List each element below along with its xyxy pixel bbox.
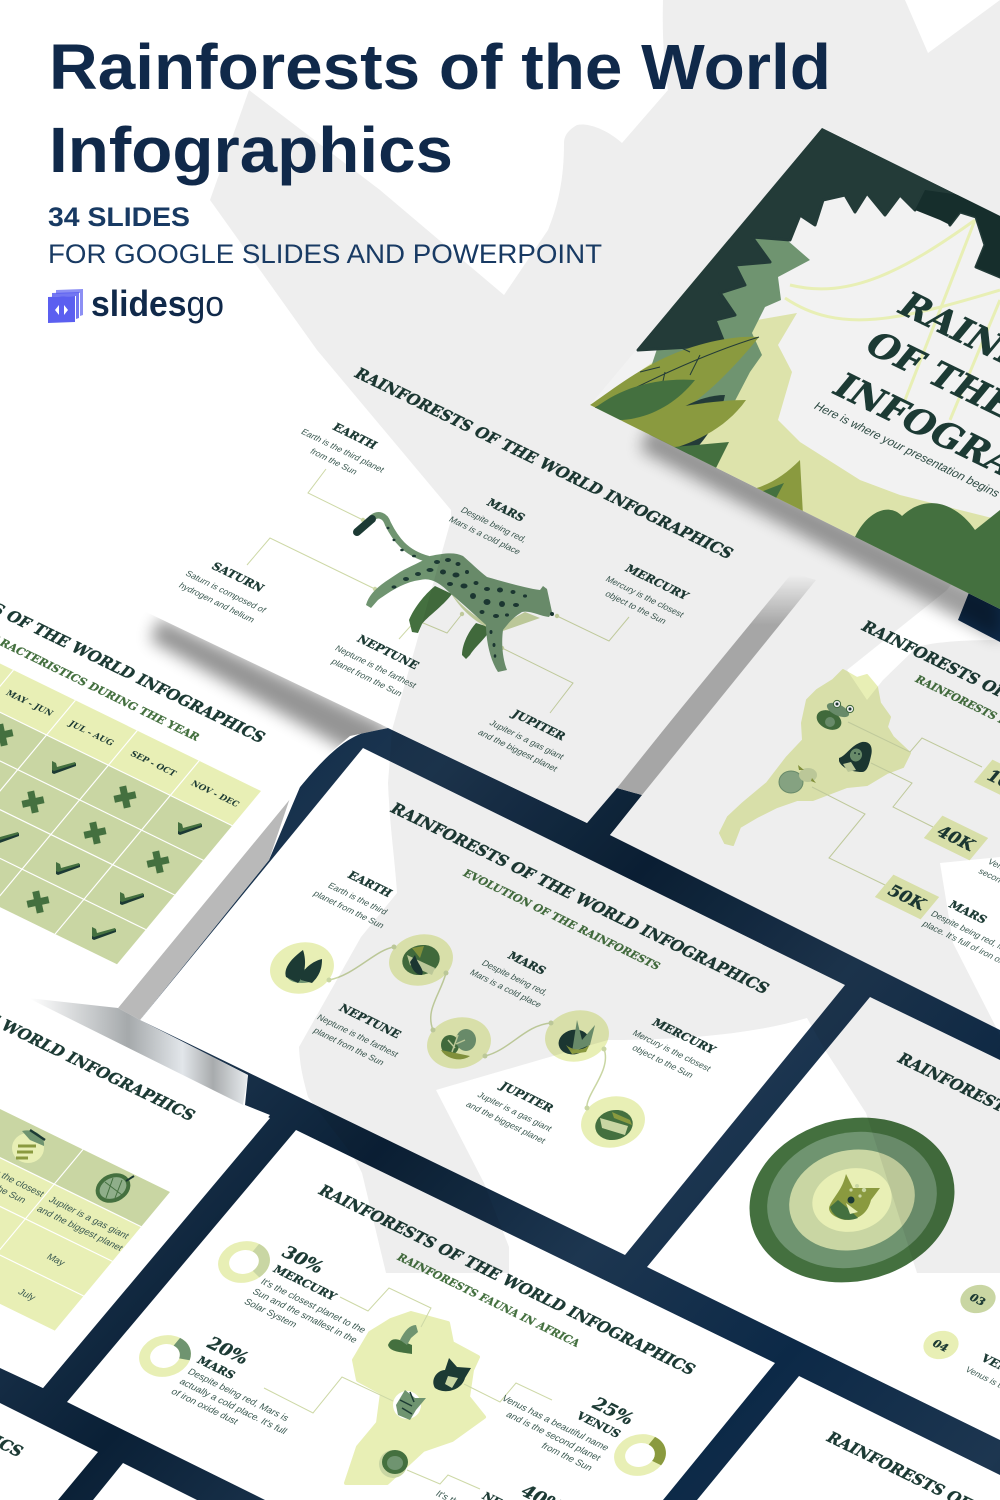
table crosses <box>0 722 171 915</box>
label: Jupiter <box>464 1073 571 1145</box>
icon: wild cat <box>829 1174 880 1220</box>
label: Mercury: Mercury is the closest <box>631 1028 713 1073</box>
badge: 03 <box>953 1280 1000 1318</box>
label: Jupiter: JUPITER <box>496 1079 557 1115</box>
panel: bottom centre slide background <box>93 1463 197 1500</box>
panel: africa slide content <box>137 1181 700 1500</box>
label: Mercury: object to the Sun <box>603 589 669 626</box>
evolution slide subtitle: EVOLUTION OF THE RAINFORESTS <box>460 867 663 972</box>
label: Mars: MARS <box>484 496 528 524</box>
label: Mars 20%: MARS <box>194 1354 238 1382</box>
label: Earth: EARTH <box>330 420 380 452</box>
panel: table slide background <box>0 560 388 1008</box>
chart: concentric rings <box>709 1088 995 1312</box>
label: Saturn: SATURN <box>209 560 268 595</box>
label: Mercury <box>622 1012 727 1084</box>
label: Mercury 30%: MERCURY <box>270 1263 340 1303</box>
map: south america <box>720 670 910 845</box>
connector lines <box>264 1288 552 1489</box>
navy piece under cover slide <box>958 590 1000 650</box>
panel: rings slide content <box>709 1049 1000 1419</box>
stat box: 50K: 50K <box>883 882 931 914</box>
label: Mars: MARS <box>505 949 549 977</box>
table text: and the biggest planet <box>34 1204 125 1254</box>
label: Earth <box>290 411 400 485</box>
label: Mercury 30% <box>241 1243 368 1356</box>
icon: turtle <box>379 1450 408 1478</box>
label: Mars 20%: 20% <box>202 1334 253 1368</box>
label: Neptune <box>306 996 415 1070</box>
label: Earth <box>311 862 409 930</box>
illustration: leopard <box>357 515 554 672</box>
vines <box>785 220 1000 420</box>
label: Earth: from the Sun <box>308 447 360 476</box>
label: Neptune: NEPTUNE <box>336 1001 404 1041</box>
label: Earth: EARTH <box>345 868 395 900</box>
panel: lower-left table content <box>0 926 200 1331</box>
label: Jupiter: and the biggest planet <box>464 1100 548 1145</box>
connector lines <box>812 722 982 885</box>
panel: evolution slide content <box>257 799 774 1157</box>
table text: Jupiter is a gas giant <box>46 1195 131 1241</box>
green leaf <box>595 380 695 420</box>
stat box: 40K <box>924 816 988 860</box>
table ticks <box>0 761 202 940</box>
label: Earth: Earth is the third <box>326 881 390 916</box>
icon: forest stage 4 <box>552 1020 596 1059</box>
icon: forest stage 1 <box>285 950 322 983</box>
label: Mercury 30%: It's the closest planet to the <box>258 1277 368 1336</box>
stage connectors <box>329 947 605 1108</box>
table: species <box>0 1065 170 1331</box>
panel: evolution slide background <box>140 748 845 1255</box>
icon: turtle <box>779 765 817 793</box>
icon: zebra <box>393 1390 426 1420</box>
label: Venus 25%: from the Sun <box>539 1441 594 1473</box>
dark canopy <box>638 128 1000 350</box>
label: Mercury: MERCURY <box>622 562 693 603</box>
donut: Mars 20% <box>137 1334 193 1378</box>
panel: africa slide background <box>67 1130 775 1500</box>
table text <box>0 1151 134 1303</box>
label: Mars: Despite being red, <box>459 505 529 544</box>
label: Mercury 30%: Sun and the smallest in the <box>250 1287 359 1345</box>
darker canopy corner <box>915 190 1000 277</box>
grey silhouette watermark <box>210 0 1000 1273</box>
label: Mars 20%: of iron oxide dust <box>168 1387 241 1427</box>
pale foliage <box>590 313 1000 609</box>
icon: frog <box>813 700 854 734</box>
label: Mars: Mars is a cold place <box>468 968 544 1009</box>
donut: Mercury 30% <box>216 1240 272 1284</box>
label: Saturn <box>174 552 282 626</box>
wordmark: slidesgo <box>91 283 224 324</box>
table text: May <box>44 1252 67 1268</box>
label: Jupiter: JUPITER <box>508 707 569 743</box>
table: seasons grid: JUL - AUG <box>65 719 116 748</box>
leopard slide title: RAINFORESTS OF THE WORLD INFOGRAPHICS <box>350 364 738 562</box>
title <box>49 31 831 186</box>
panel: leopard slide content <box>174 364 738 773</box>
map: africa <box>346 1313 484 1483</box>
grey shard beside table slide <box>118 798 290 1020</box>
green bush <box>855 503 1000 609</box>
subtitle: slide count: 34 SLIDES <box>48 202 190 232</box>
label: Saturn: Saturn is composed of <box>183 569 268 615</box>
lower olive leaf <box>757 460 803 511</box>
shadow of leopard slide <box>150 618 392 762</box>
icon: stacked slides <box>48 289 83 323</box>
label: Earth: Earth is the third planet <box>299 427 387 474</box>
connector lines <box>247 469 629 713</box>
logo: slidesgo <box>48 283 224 324</box>
label: Mars 20%: Despite being red, Mars is <box>185 1367 291 1424</box>
table: seasons grid: MAY - JUN <box>3 689 55 719</box>
table text: July <box>16 1287 38 1303</box>
label: Mars <box>447 488 545 556</box>
label: Mars <box>468 941 566 1009</box>
label: Mars 20%: actually a cold place. It's full <box>177 1377 289 1437</box>
grey gap between leopard slide and map slide <box>617 572 816 795</box>
panel: rings slide background <box>647 997 1000 1440</box>
label: Mercury: Mercury is the closest <box>604 574 686 619</box>
badge: 04: 04 <box>929 1337 952 1354</box>
panel: cover slide <box>590 128 1000 609</box>
shadow of cover slide <box>640 425 1000 640</box>
evolution slide title: RAINFORESTS OF THE WORLD INFOGRAPHICS <box>386 799 774 997</box>
label: Mars 20% <box>168 1334 297 1447</box>
label: Neptune: planet from the Sun <box>329 657 405 698</box>
panel: south america slide content <box>720 617 1000 983</box>
icon: forest stage 5 <box>588 1104 640 1146</box>
label: Mars <box>920 894 1000 983</box>
label: Mercury 30%: Solar System <box>241 1297 299 1330</box>
donut: Venus 25% <box>612 1433 668 1477</box>
label: Neptune <box>324 627 433 701</box>
medium foliage <box>652 238 810 402</box>
icon: beehive fruit <box>12 1130 45 1163</box>
label: Venus 25%: and is the second planet <box>503 1410 603 1463</box>
label: Mercury <box>595 558 700 630</box>
table: seasons grid: NOV - DEC <box>188 779 241 810</box>
label: Mars: Despite being red, <box>480 958 550 997</box>
label: Mercury: MERCURY <box>649 1016 720 1057</box>
second olive leaf <box>622 400 746 448</box>
subtitle: compatibility: FOR GOOGLE SLIDES AND POWERPOINT <box>48 239 602 269</box>
icon: forest stage 2 <box>395 939 447 981</box>
label: Jupiter <box>476 701 583 773</box>
connector dots <box>326 944 606 1110</box>
stat box: 10K <box>974 760 1000 804</box>
label: Saturn: hydrogen and helium <box>177 581 257 624</box>
panel: bottom left slide background <box>0 1403 98 1500</box>
label: Jupiter: Jupiter is a gas giant <box>476 1090 554 1133</box>
label: Mercury: object to the Sun <box>630 1043 696 1080</box>
icon: gorilla <box>839 742 872 772</box>
label: Mars: MARS <box>946 898 990 926</box>
shadow strip under evolution slide <box>28 998 248 1105</box>
label: Earth: planet from the Sun <box>311 889 387 930</box>
label: Neptune: Neptune is the farthest <box>333 643 419 690</box>
stat box: 50K <box>875 875 939 919</box>
label: Mars: Mars is a cold place <box>447 515 523 556</box>
icon: black cat <box>433 1358 471 1391</box>
badge: 04 <box>916 1326 966 1364</box>
badge: 03: 03 <box>966 1291 988 1308</box>
navy backdrop behind slides <box>0 728 1000 1500</box>
label: Mercury 30%: 30% <box>277 1243 328 1277</box>
title: Infographics <box>49 114 453 186</box>
label: Neptune 40% <box>433 1482 567 1500</box>
lower green leaf <box>674 442 729 470</box>
label: Venus 25% <box>482 1394 638 1473</box>
panel: bottom right slide background <box>697 1376 1000 1500</box>
label: Neptune: Neptune is the farthest <box>315 1012 401 1059</box>
lower pale spike <box>763 483 784 498</box>
label: Venus 25%: Venus has a beautiful name <box>499 1394 611 1453</box>
title: Rainforests of the World <box>49 31 831 103</box>
label: Venus 25%: VENUS <box>572 1409 624 1440</box>
label: Neptune: planet from the Sun <box>311 1026 387 1067</box>
panel: lower-left table slide background <box>0 987 270 1388</box>
label: Venus 25%: 25% <box>587 1394 638 1429</box>
cover title <box>831 291 1000 476</box>
icon: snake on rock <box>388 1325 418 1354</box>
panel: leopard slide background <box>100 320 815 823</box>
africa slide subtitle: RAINFORESTS FAUNA IN AFRICA <box>394 1251 583 1350</box>
table: seasons grid: SEP - OCT <box>128 750 179 779</box>
icon: forest stage 3 <box>441 1029 476 1059</box>
icon: durian <box>91 1168 135 1208</box>
label: Jupiter: Jupiter is a gas giant <box>488 718 566 761</box>
stage circles <box>257 925 658 1157</box>
olive leaf <box>590 337 759 430</box>
dark leaf <box>645 395 725 455</box>
label: Jupiter: and the biggest planet <box>476 728 560 773</box>
panel: table slide content <box>0 548 270 964</box>
label: Neptune: NEPTUNE <box>354 632 422 672</box>
table: seasons grid <box>0 610 261 964</box>
africa slide title: RAINFORESTS OF THE WORLD INFOGRAPHICS <box>314 1181 700 1378</box>
panel: south america slide background <box>610 560 1000 1026</box>
leaf veins <box>595 337 759 408</box>
stat box: 40K: 40K <box>932 823 980 855</box>
